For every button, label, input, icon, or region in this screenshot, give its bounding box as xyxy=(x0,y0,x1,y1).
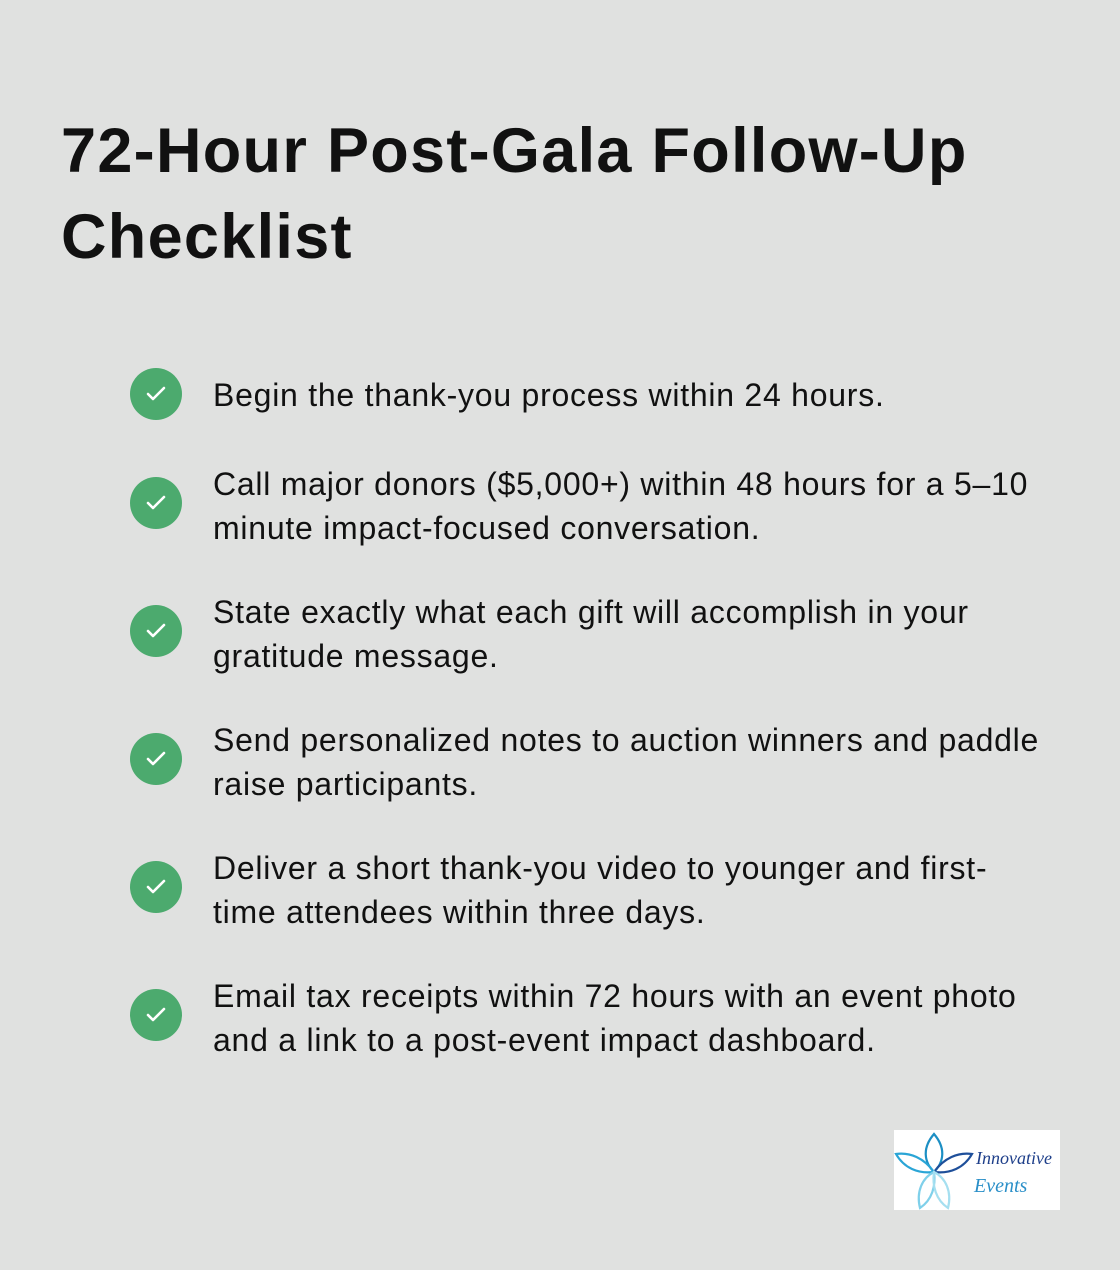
icon: check xyxy=(130,368,182,420)
text xyxy=(213,594,969,674)
text: Email tax receipts within 72 hours with an event photo xyxy=(213,978,1017,1014)
text: Deliver a short thank-you video to younger and first- xyxy=(213,850,987,886)
text: raise participants. xyxy=(213,766,478,802)
title xyxy=(61,116,968,272)
text: gratitude message. xyxy=(213,638,499,674)
text: Begin the thank-you process within 24 hours. xyxy=(213,377,885,413)
item 2 xyxy=(130,466,1028,546)
text: time attendees within three days. xyxy=(213,894,706,930)
text xyxy=(213,850,987,930)
item 5 xyxy=(130,850,987,930)
text: Send personalized notes to auction winners and paddle xyxy=(213,722,1039,758)
logo: Innovative xyxy=(975,1148,1052,1168)
item 1 xyxy=(130,368,885,420)
text: and a link to a post-event impact dashboard. xyxy=(213,1022,876,1058)
icon: check xyxy=(130,989,182,1041)
text xyxy=(213,722,1039,802)
icon: check xyxy=(130,861,182,913)
text: State exactly what each gift will accomplish in your xyxy=(213,594,969,630)
item 6 xyxy=(130,978,1017,1058)
logo xyxy=(894,1130,1060,1210)
logo: Events xyxy=(973,1175,1028,1197)
item 4 xyxy=(130,722,1039,802)
icon: check xyxy=(130,605,182,657)
text xyxy=(213,978,1017,1058)
text: Call major donors ($5,000+) within 48 hours for a 5–10 xyxy=(213,466,1028,502)
icon: check xyxy=(130,477,182,529)
item 3 xyxy=(130,594,969,674)
icon: check xyxy=(130,733,182,785)
text xyxy=(213,466,1028,546)
title: 72-Hour Post-Gala Follow-Up xyxy=(61,116,968,186)
text: minute impact-focused conversation. xyxy=(213,510,760,546)
title: Checklist xyxy=(61,202,353,272)
